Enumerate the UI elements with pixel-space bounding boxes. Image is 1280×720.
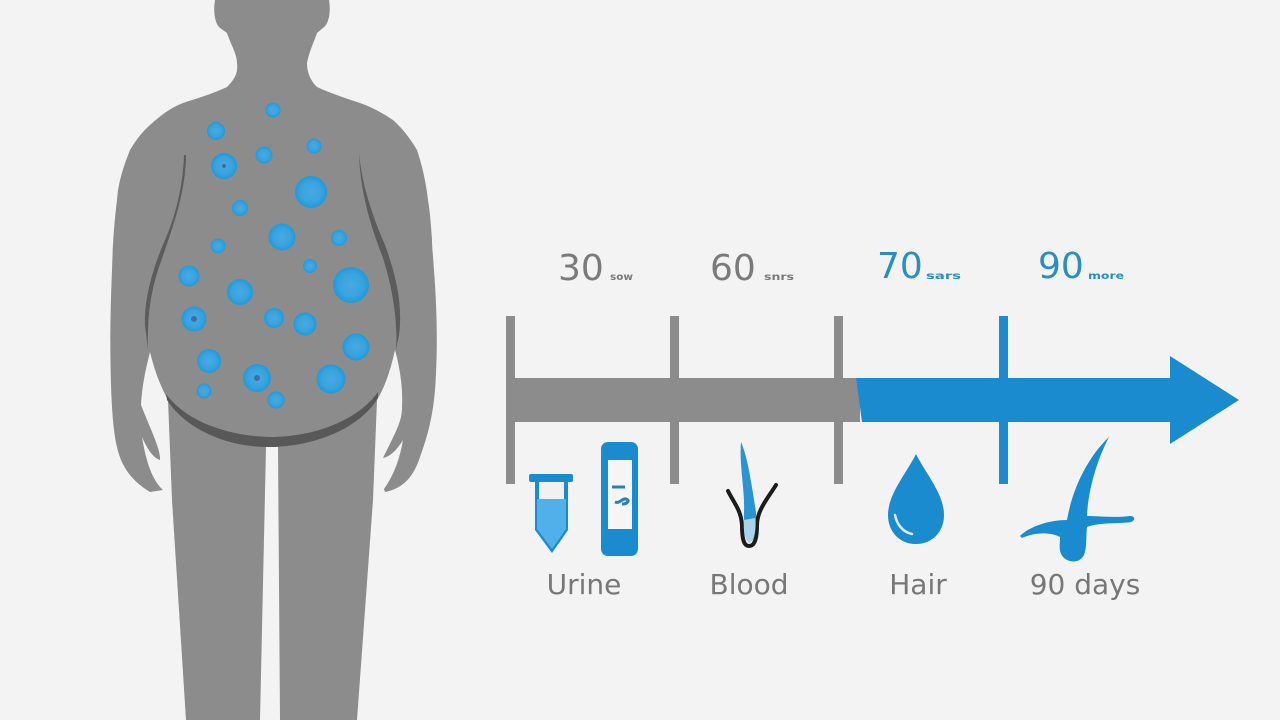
label: Hair: Hair (889, 568, 947, 601)
left body crease (145, 155, 186, 350)
icon: hair follicle (1020, 437, 1134, 561)
icon: blood follicle (728, 442, 776, 546)
icon: test strip (601, 442, 638, 556)
time label: 90 (1038, 246, 1124, 287)
time label: 60: 60 (710, 248, 756, 289)
time label: 90: more (1088, 271, 1124, 282)
time label: 70: sars (926, 271, 961, 282)
label: Urine: Urine (547, 568, 621, 601)
tick: 60 (670, 316, 679, 484)
grey bar segment (510, 378, 860, 422)
deposits: dark cores (191, 164, 260, 381)
tick: 30 (506, 316, 515, 484)
time label: 70: 70 (877, 246, 923, 287)
tick: 70 (834, 316, 843, 484)
time label: 60: snrs (764, 272, 794, 283)
timeline arrow (506, 316, 1239, 484)
time label: 30: sow (610, 272, 633, 283)
belly underside shadow (166, 392, 378, 447)
blue arrow segment (856, 356, 1239, 444)
time label: 30: 30 (558, 248, 604, 289)
label: Blood: Blood (709, 568, 789, 601)
tick: 90 (999, 316, 1008, 484)
time label: 60 (710, 248, 794, 289)
figure: human silhouette with deposits (110, 0, 437, 720)
icon: test tube (529, 474, 573, 553)
body silhouette (110, 0, 437, 720)
time label: 30 (558, 248, 633, 289)
deposits: blue circles (178, 102, 370, 408)
icon: water drop (888, 454, 944, 544)
label: 90 days: 90 days (1030, 568, 1140, 601)
right body crease (359, 153, 400, 350)
time label: 90: 90 (1038, 246, 1084, 287)
time label: 70 (877, 246, 961, 287)
